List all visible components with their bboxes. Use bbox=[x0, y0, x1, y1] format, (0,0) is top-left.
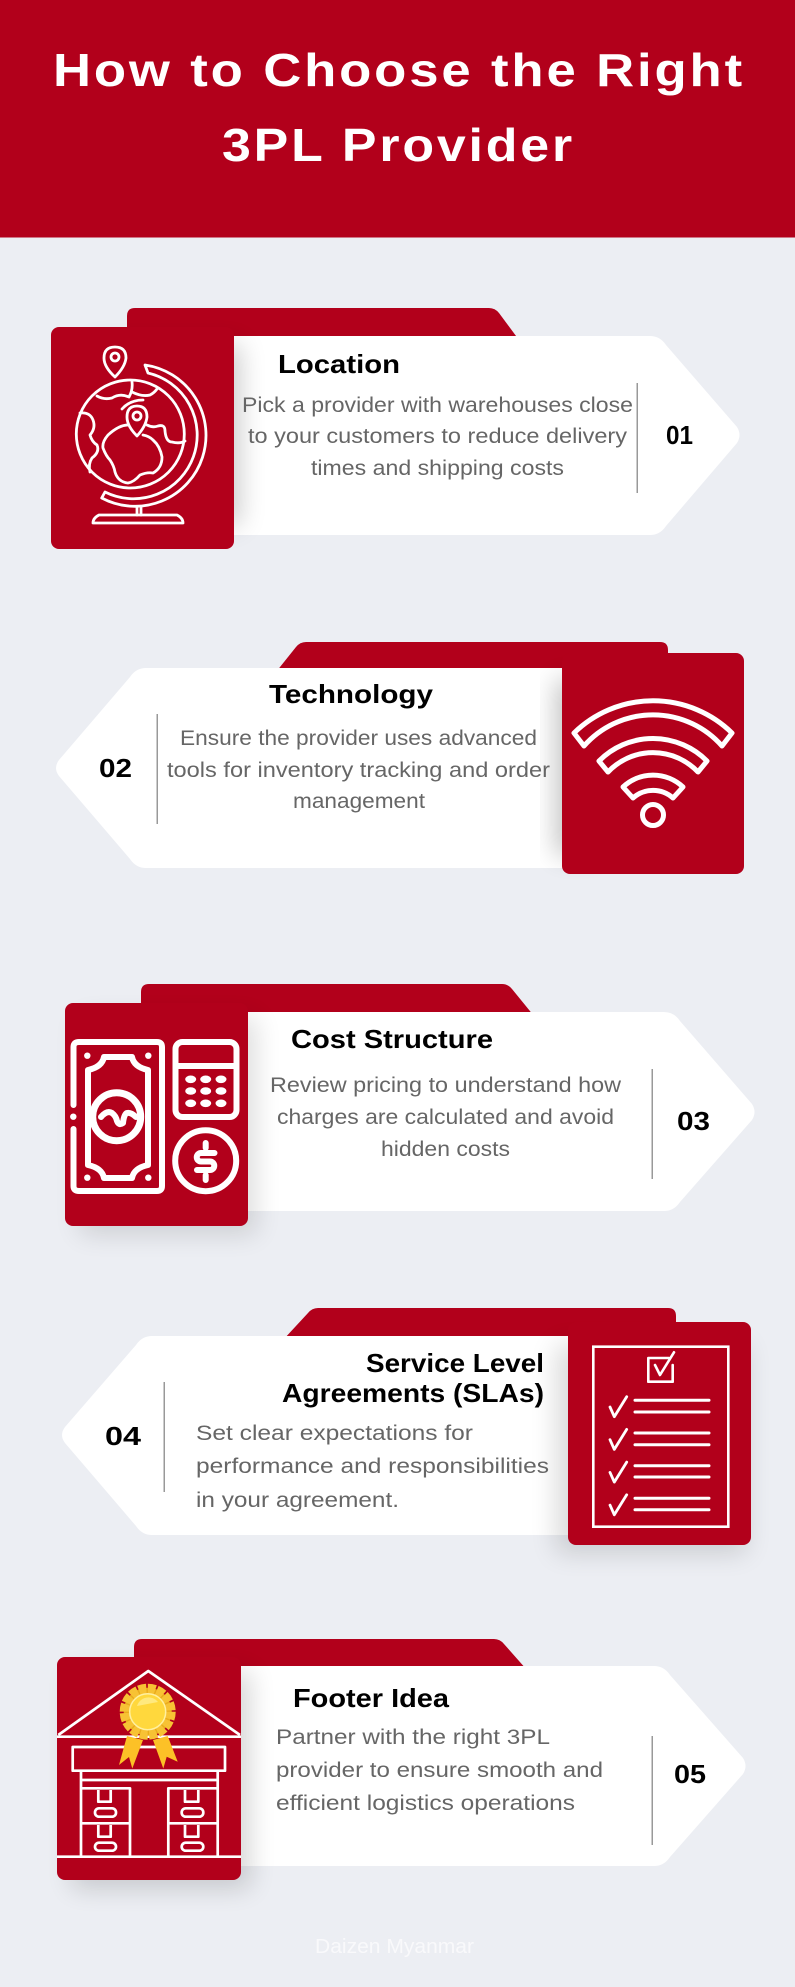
icon card bbox=[562, 653, 744, 874]
description bbox=[270, 1074, 622, 1161]
description bbox=[242, 394, 633, 480]
back tab bbox=[276, 642, 668, 672]
panel: footer idea bbox=[57, 1639, 746, 1888]
title: How to Choose the Right bbox=[53, 44, 745, 96]
description: Partner with the right 3PL bbox=[276, 1726, 550, 1749]
back tab bbox=[141, 984, 534, 1016]
icon: checklist bbox=[593, 1347, 728, 1527]
icon: wifi bbox=[574, 701, 732, 826]
heading: Service Level bbox=[366, 1348, 544, 1378]
icon: warehouse bbox=[57, 1671, 241, 1857]
heading: Location bbox=[278, 349, 400, 379]
icon card bbox=[568, 1322, 751, 1545]
heading: Agreements (SLAs) bbox=[282, 1378, 544, 1408]
description: efficient logistics operations bbox=[276, 1792, 575, 1815]
description bbox=[196, 1422, 549, 1512]
number: 05 bbox=[674, 1761, 706, 1789]
arrow card bbox=[210, 1012, 754, 1211]
icon: globe bbox=[76, 347, 206, 523]
icon card bbox=[57, 1657, 241, 1880]
description: Ensure the provider uses advanced bbox=[180, 727, 537, 750]
number: 04 bbox=[105, 1423, 142, 1451]
back tab bbox=[127, 308, 519, 340]
description: Review pricing to understand how bbox=[270, 1074, 622, 1097]
number: 01 bbox=[666, 422, 693, 450]
panel: location bbox=[51, 308, 740, 549]
header banner bbox=[0, 0, 795, 238]
icon: gold rosette badge bbox=[119, 1688, 178, 1768]
back tab bbox=[134, 1639, 527, 1670]
arrow card bbox=[200, 336, 740, 535]
footer credit: Daizen Myanmar bbox=[315, 1936, 474, 1958]
description: management bbox=[293, 790, 425, 813]
number: 03 bbox=[677, 1108, 710, 1136]
arrow card bbox=[62, 1336, 600, 1535]
description: charges are calculated and avoid bbox=[277, 1106, 614, 1129]
icon card bbox=[65, 1003, 248, 1226]
description: hidden costs bbox=[381, 1138, 510, 1161]
title: 3PL Provider bbox=[222, 119, 575, 171]
panel: service level agreements bbox=[62, 1308, 751, 1553]
heading: Footer Idea bbox=[293, 1683, 450, 1713]
description: performance and responsibilities bbox=[196, 1455, 549, 1478]
description bbox=[167, 727, 550, 813]
heading: Cost Structure bbox=[291, 1024, 493, 1054]
panel: technology bbox=[56, 642, 744, 874]
heading: Technology bbox=[269, 679, 434, 709]
panel: cost structure bbox=[65, 984, 754, 1234]
description: times and shipping costs bbox=[311, 457, 564, 480]
title bbox=[53, 44, 745, 171]
description: provider to ensure smooth and bbox=[276, 1759, 603, 1782]
description: tools for inventory tracking and order bbox=[167, 759, 550, 782]
description: Pick a provider with warehouses close bbox=[242, 394, 633, 417]
description: Set clear expectations for bbox=[196, 1422, 473, 1445]
icon dots bbox=[70, 1052, 226, 1181]
description: in your agreement. bbox=[196, 1489, 399, 1512]
icon card bbox=[51, 327, 234, 549]
description bbox=[276, 1726, 603, 1815]
icon: money and calculator bbox=[74, 1042, 236, 1191]
arrow card bbox=[205, 1666, 746, 1866]
number: 02 bbox=[99, 755, 132, 783]
arrow card bbox=[56, 668, 600, 868]
heading bbox=[282, 1348, 544, 1408]
back tab bbox=[283, 1308, 676, 1340]
description: to your customers to reduce delivery bbox=[248, 425, 628, 448]
